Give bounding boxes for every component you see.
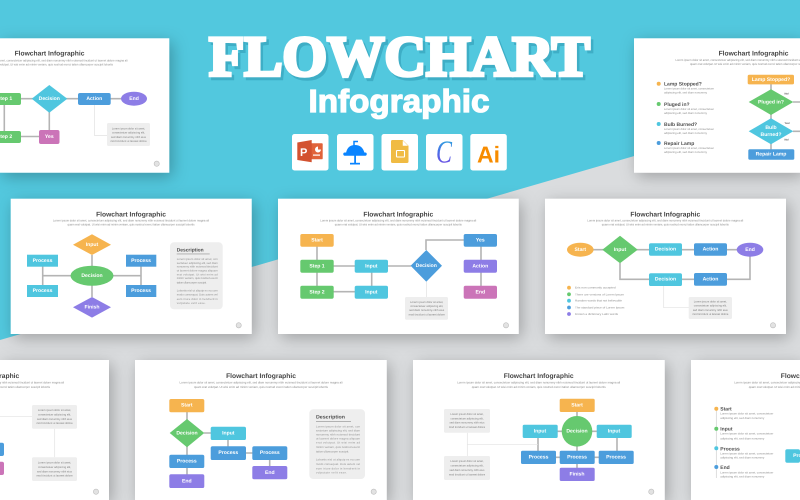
node: Process bottom left: [27, 285, 58, 297]
background: teal diagonal panel: [0, 0, 800, 340]
node: Finish: Finish: [84, 305, 100, 311]
description panel: [170, 242, 223, 309]
node: Process top left: Process: [33, 258, 53, 264]
list: Input: Lorem ipsum dolor sit amet, consectetuer: [720, 432, 773, 436]
footer icon: [154, 161, 159, 166]
node: Bulb Burned: Bulb: [765, 125, 777, 131]
connectors: [4, 99, 121, 136]
connectors: [187, 412, 270, 475]
node: Start: Start: [311, 238, 323, 244]
description panel: Description: [177, 248, 204, 254]
bullet list: Known a dictionary Latin words: [575, 312, 619, 316]
description panel: Lorem ipsum dolor sit amet, con: [316, 424, 360, 428]
callout note lower: sed diam nonummy nibh eius: [450, 469, 485, 472]
node: Decision: [70, 266, 114, 286]
footer icon: [770, 323, 776, 328]
list: Input: Input: [720, 427, 733, 433]
slide subtitle: [0, 58, 128, 66]
node: Step 1: Step 1: [309, 263, 325, 269]
icon: Adobe Illustrator: [470, 134, 507, 170]
node: Start: Start: [574, 247, 586, 253]
slide title: Flowchart Infographic: [15, 51, 85, 58]
callout note lower: [444, 456, 490, 480]
node: Input: Input: [222, 430, 235, 436]
slide subtitle: quam erat volutpat. Ut wisi enim ad minim veniam, quis nostrud exerci tation ullamcorper suscipit lobortis: [602, 223, 729, 227]
node: Decision lower: [649, 273, 682, 286]
description panel: erat volutpat. Ut wisi enim ad: [316, 441, 360, 445]
branch labels: [784, 92, 790, 141]
list: Bulb Burned: Bulb Burned?: [664, 122, 697, 128]
callout note: [689, 297, 732, 319]
slide subtitle: Lorem ipsum dolor sit amet, consectetuer adipiscing elit, sed diam nonummy nibh euismod tincidunt ut laoreet dolore magna ali: [180, 381, 343, 385]
list: Process: [714, 446, 773, 460]
node: Yes: [464, 234, 497, 247]
callout note lower: Lorem ipsum dolor sit amet,: [38, 462, 71, 464]
icon: Keynote: [337, 134, 374, 170]
node: Process right: Process: [606, 454, 626, 460]
footer icon: [371, 489, 376, 494]
node: Start: [560, 399, 595, 412]
description panel: Description: [316, 415, 345, 421]
callout note lower: mod tincidunt ut laoreet dolore: [36, 475, 73, 478]
slide subtitle: [457, 381, 621, 389]
footer icon: [236, 323, 241, 328]
callout leader: [664, 286, 689, 308]
node: Input right: [597, 425, 632, 438]
description panel: minim veniam, quis nostrud exerci: [177, 276, 218, 280]
node: Process left: [169, 455, 204, 468]
list: End: adipiscing elit, sed diam nonummy: [720, 475, 765, 479]
slide subtitle: Lorem ipsum dolor sit amet, consectetuer adipiscing elit, sed diam nonummy nibh euismod tincidunt ut laoreet dolore magna ali: [457, 381, 621, 385]
description panel: nonummy nibh euismod tincidunt: [316, 432, 360, 436]
node: Input: [602, 236, 638, 263]
node: Process top left: [27, 255, 58, 267]
slide subtitle: Lorem ipsum dolor sit amet, consectetuer adipiscing elit, sed diam nonummy nibh euismod tincidunt ut laoreet dolore magna ali: [587, 219, 744, 223]
node: Input lower: Input: [365, 289, 378, 295]
callout note upper: [444, 409, 490, 433]
slide subtitle: [53, 219, 209, 227]
callout note: sed diam nonummy nibh eius: [111, 136, 147, 139]
node: Action lower: Action: [703, 276, 718, 282]
slide subtitle: Lorem ipsum dolor sit amet, consectetuer adipiscing elit, sed diam nonummy nibh euismod tincidunt ut laoreet dolore magna ali: [53, 219, 209, 223]
slide subtitle: [734, 381, 800, 389]
slide title: Flowchart Infographic: [226, 373, 296, 380]
node: Input: Input: [86, 242, 99, 248]
node: End: End: [129, 96, 139, 102]
icon: Canva: [426, 134, 462, 170]
node: Process left: Process: [177, 458, 197, 464]
callout note upper: sed diam nonummy nibh eius: [450, 422, 485, 425]
slide card: [634, 38, 800, 173]
list: Process: adipiscing elit, sed diam nonummy: [720, 456, 765, 460]
callout note lower: consectetuer adipiscing elit,: [450, 464, 484, 468]
node: Finish: Finish: [570, 471, 584, 477]
connectors: [538, 412, 617, 468]
node: End right: [252, 466, 287, 479]
node: blue partial: [0, 443, 4, 456]
callout note upper: consectetuer adipiscing elit,: [38, 414, 71, 416]
description panel: nonummy nibh euismod tincidunt: [177, 265, 218, 269]
node: Input: [211, 427, 246, 440]
node: Bulb Burned: Burned?: [761, 132, 781, 138]
list: Lamp Stopped: Lorem ipsum dolor sit amet, consectetuer: [664, 87, 714, 91]
slide content: [0, 51, 159, 166]
list: Bulb Burned: Lorem ipsum dolor sit amet, consectetuer: [664, 127, 714, 131]
node: Process partial: [785, 449, 800, 463]
slide: branching process with description: [135, 360, 387, 500]
node: Finish: [560, 468, 595, 481]
slide content: [444, 373, 654, 494]
list: Start: [714, 407, 773, 420]
node: Input right: Input: [608, 428, 621, 434]
list: Pluged in: [657, 102, 714, 115]
slide subtitle: Lorem ipsum dolor sit amet, consectetuer adipiscing elit, sed diam nonummy nibh euismod tincidunt ut laoreet dolore magna ali: [320, 219, 477, 223]
node: Action: [78, 93, 111, 105]
node: Decision: [170, 419, 204, 447]
node: End left: [169, 474, 204, 488]
icon: Adobe Illustrator: Ai: [477, 141, 500, 167]
callout note upper: Lorem ipsum dolor sit amet,: [450, 413, 484, 416]
node: Lamp Stopped: Lamp Stopped?: [752, 77, 790, 83]
slide subtitle: [676, 58, 800, 66]
slide: top-left flowchart: [0, 38, 169, 173]
description panel: modo consequat. Duis autem vel: [316, 462, 360, 466]
slide subtitle: quam erat volutpat. Ut wisi enim ad minim veniam, quis nostrud exerci tation ullamcorper suscipit lobortis: [194, 385, 328, 389]
slide: two-row flow with list: [545, 199, 786, 334]
bullet list: Eris non commonly accepted: [575, 286, 616, 290]
list: Repair Lamp: Lorem ipsum dolor sit amet, consectetuer: [664, 146, 714, 150]
slide content: [714, 373, 800, 479]
description panel: erat volutpat. Ut wisi enim ad: [177, 272, 218, 276]
node: Decision: Decision: [416, 263, 437, 269]
callout note upper: mod tincidunt ut laoreet dolore: [449, 426, 486, 429]
slide card: [545, 199, 786, 334]
callout note lower: Lorem ipsum dolor sit amet,: [450, 460, 484, 463]
slide subtitle: [320, 219, 477, 227]
description panel: ut laoreet dolore magna aliquam: [316, 436, 361, 440]
slide content: [169, 373, 376, 494]
node: Yes: Yes: [476, 238, 485, 244]
node: Process middle: Process: [567, 454, 587, 460]
node: Action upper: Action: [703, 246, 718, 252]
slide subtitle: quam erat volutpat. Ut wisi enim ad minim veniam, quis nostrud exerci tation ullamcorper suscipit lobortis: [68, 223, 195, 227]
list: End: [714, 465, 773, 479]
list: Pluged in: Pluged in?: [664, 102, 690, 108]
node: End left: End: [182, 478, 192, 484]
node: Action upper: [694, 243, 727, 256]
node: Action lower: [694, 273, 727, 286]
slide card: [691, 360, 800, 500]
callout note lower: [32, 457, 77, 481]
description panel: vulputate velit esse.: [177, 301, 206, 305]
node: Repair Lamp: [748, 149, 794, 160]
node: Decision: [32, 85, 67, 113]
branch labels: No!: [784, 92, 789, 95]
list: Bulb Burned: [657, 122, 714, 135]
node: Decision: Decision: [39, 96, 60, 102]
bullet list: There are versions of Lorem Ipsum: [575, 292, 625, 296]
bullet list: The standard piece of Lorem Ipsum: [575, 306, 625, 310]
description panel: [309, 409, 365, 479]
node: Process top right: Process: [131, 258, 151, 264]
slide card: [0, 360, 109, 500]
slide card: [11, 199, 252, 334]
list: Lamp Stopped: adipiscing elit, sed diam nonummy: [664, 91, 708, 95]
slide content: [300, 212, 509, 328]
slide: top-right decision list: [634, 38, 800, 173]
node: Lamp Stopped: [748, 75, 794, 84]
callout leaders: [467, 433, 538, 456]
node: Process right: [252, 446, 287, 460]
callout note: Lorem ipsum dolor sit amet,: [410, 301, 444, 304]
callout note: mod tincidunt ut laoreet dolore: [110, 140, 147, 143]
slide card: [135, 360, 387, 500]
node: Pluged in: [749, 89, 793, 115]
node: Input upper: Input: [365, 263, 378, 269]
slide card: [278, 199, 519, 334]
icon: PowerPoint: [292, 134, 328, 170]
node: Process middle: Process: [218, 450, 238, 456]
node: Decision: [562, 416, 592, 447]
description panel: eum iriure dolor in hendrerit in: [177, 297, 218, 301]
callout note: [107, 123, 150, 146]
icon: Canva: C: [436, 134, 452, 170]
slide: bottom-left cropped: [0, 360, 109, 500]
callout note upper: sed diam nonummy nibh eius: [37, 418, 73, 421]
callout leader: [94, 105, 107, 136]
slide content: [657, 50, 800, 160]
node: Step 2: [300, 286, 334, 299]
footer icon: [503, 323, 509, 328]
node: Decision upper: [649, 243, 682, 256]
node: Step 2: Step 2: [309, 289, 325, 295]
node: pink partial: [0, 462, 4, 475]
node: Process middle: [560, 451, 595, 464]
node: Process bottom right: Process: [131, 288, 151, 294]
node: Process right: Process: [260, 450, 280, 456]
description panel: tation ullamcorper suscipit.: [316, 449, 349, 453]
node: Action: Action: [86, 96, 102, 102]
connectors: [317, 240, 481, 292]
node: Process top right: [126, 255, 156, 267]
branch labels: No!: [784, 138, 789, 141]
bullet list: [567, 286, 625, 316]
callout note lower: mod tincidunt ut laoreet dolore: [449, 473, 486, 476]
node: End: [121, 92, 147, 106]
footer icon: [93, 489, 99, 494]
node: Input left: Input: [534, 428, 547, 434]
slide content: [567, 212, 776, 328]
node: Process bottom left: Process: [33, 288, 53, 294]
slide content: [27, 212, 241, 328]
callout note upper: [32, 405, 77, 429]
footer icon: [649, 489, 654, 494]
list: Start: adipiscing elit, sed diam nonummy: [720, 416, 765, 420]
list: Bulb Burned: adipiscing elit, sed diam nonummy: [664, 131, 708, 135]
list: Lamp Stopped: Lamp Stopped?: [664, 82, 702, 88]
list: Repair Lamp: [657, 141, 714, 154]
slide subtitle: [587, 219, 744, 227]
list: Start: Lorem ipsum dolor sit amet, consectetuer: [720, 412, 773, 416]
node: End right: End: [265, 470, 275, 476]
slide: steps to decision: [278, 199, 519, 334]
list: End: Lorem ipsum dolor sit amet, consectetuer: [720, 470, 773, 474]
node: Finish: [73, 297, 111, 318]
bullet list: Random words that not believable: [575, 299, 622, 303]
node: Start: Start: [571, 402, 583, 408]
callout leader: [426, 282, 428, 297]
list: End: End: [720, 465, 730, 471]
node: Start: [567, 243, 594, 257]
callout note: Lorem ipsum dolor sit amet,: [694, 300, 727, 304]
list: Input: [714, 427, 773, 440]
node: Process left: [521, 451, 556, 464]
heading: FLOWCHART: FLOWCHART: [209, 26, 590, 88]
connectors: [771, 84, 800, 150]
node: End: [737, 243, 763, 257]
list: Pluged in: adipiscing elit, sed diam nonummy: [664, 111, 708, 115]
description panel: Lobortis nisl ut aliquip ex ea com: [177, 289, 218, 293]
slide title: Flowchart Infographic: [630, 212, 701, 219]
connectors: [43, 255, 141, 297]
callout leaders: [0, 416, 55, 457]
node: Action: [464, 260, 497, 273]
heading: Infographic: Infographic: [308, 83, 490, 119]
callout note: [405, 297, 448, 320]
slide content: [0, 373, 99, 494]
description panel: Lorem ipsum dolor sit amet, con: [177, 257, 218, 261]
timeline line: [715, 408, 717, 478]
callout note upper: mod tincidunt ut laoreet dolore: [36, 422, 73, 425]
list: Lamp Stopped: [657, 82, 714, 95]
node: Step 1: [300, 260, 334, 273]
node: Input upper: [355, 260, 388, 273]
node: Input: Input: [614, 247, 627, 253]
node: Step 2: [0, 131, 21, 143]
callout note lower: sed diam nonummy nibh eius: [37, 470, 73, 474]
node: Repair Lamp: Repair Lamp: [756, 152, 786, 158]
callout note: mod tincidunt ut laoreet dolore: [409, 313, 445, 316]
slide subtitle: [0, 381, 64, 389]
icon: PowerPoint: P: [300, 147, 307, 159]
list: Input: adipiscing elit, sed diam nonummy: [720, 436, 765, 440]
callout note lower: consectetuer adipiscing elit,: [38, 466, 71, 469]
node: Action: Action: [472, 263, 488, 269]
node: Pluged in: Pluged in?: [758, 99, 784, 105]
node: Process right: [599, 451, 634, 464]
list: Pluged in: Lorem ipsum dolor sit amet, consectetuer: [664, 107, 714, 111]
callout note: consectetuer adipiscing elit,: [410, 305, 443, 308]
slide card: [0, 38, 169, 173]
node: Decision upper: Decision: [655, 247, 676, 253]
callout note: mod tincidunt ut laoreet dolore: [692, 313, 729, 316]
callout note: consectetuer adipiscing elit,: [694, 305, 727, 308]
callout note: Lorem ipsum dolor sit amet,: [112, 128, 145, 130]
slide title: Flowchart Infographic: [719, 50, 789, 57]
node: Decision: Decision: [176, 430, 198, 436]
list: Repair Lamp: Repair Lamp: [664, 141, 694, 147]
node: Start: Start: [181, 402, 193, 408]
list: Start: Start: [720, 407, 732, 413]
node: Process left: Process: [529, 454, 549, 460]
node: Process middle: [211, 446, 246, 460]
list: Process: Process: [720, 446, 740, 452]
node: Bulb Burned: [749, 118, 793, 144]
description panel: eum iriure dolor in hendrerit in: [316, 466, 360, 470]
icon row: software formats: [292, 134, 507, 170]
slide title: Flowchart Infographic: [96, 212, 166, 219]
slide: decision hub with description: [11, 199, 252, 334]
callout note upper: consectetuer adipiscing elit,: [450, 417, 484, 420]
description panel: Lobortis nisl ut aliquip ex ea com: [316, 458, 361, 462]
description panel: tation ullamcorper suscipit.: [177, 280, 207, 284]
node: End: End: [475, 289, 485, 295]
node: Decision: Decision: [566, 429, 588, 435]
description panel: vulputate velit esse.: [316, 470, 347, 474]
node: Process bottom right: [126, 285, 156, 297]
node: Start: [300, 234, 334, 247]
branch labels: Yes!: [784, 122, 790, 125]
description panel: ut laoreet dolore magna aliquam: [177, 268, 218, 272]
node: Yes: [39, 130, 60, 144]
node: End: End: [745, 247, 755, 253]
callout note upper: Lorem ipsum dolor sit amet,: [38, 409, 71, 412]
slide title: Flowchart Infographic: [504, 373, 574, 380]
node: Decision lower: Decision: [655, 277, 676, 283]
callout note: sed diam nonummy nibh eius: [409, 309, 445, 312]
callout note: consectetuer adipiscing elit,: [112, 132, 145, 135]
slide title: Flowchart Infographic: [363, 212, 434, 219]
node: Input: [73, 234, 111, 255]
node: End: [464, 286, 497, 299]
heading: FLOWCHART: FLOWCHART: [212, 28, 592, 92]
description panel: sectetuer adipiscing elit, sed diam: [316, 428, 361, 432]
description panel: modo consequat. Duis autem vel: [177, 293, 218, 297]
icon: Google Slides: [382, 134, 418, 170]
list: Repair Lamp: adipiscing elit, sed diam nonummy: [664, 150, 708, 154]
slide subtitle: quam erat volutpat. Ut wisi enim ad minim veniam, quis nostrud exerci tation ullamcorper suscipit lobortis: [335, 223, 462, 227]
node: Decision: Decision: [81, 273, 103, 279]
slide: bottom-right timeline: [691, 360, 800, 500]
slide subtitle: quam erat volutpat. Ut wisi enim ad minim veniam, quis nostrud exerci tation ullamcorper suscipit lobortis: [472, 385, 606, 389]
slide: central decision circle: [413, 360, 665, 500]
list: Process: Lorem ipsum dolor sit amet, consectetuer: [720, 452, 773, 456]
node: Start: [169, 399, 204, 412]
connectors: [593, 250, 750, 279]
callout note: sed diam nonummy nibh eius: [693, 309, 728, 312]
description panel: sectetuer adipiscing elit, sed diam: [177, 261, 218, 265]
description panel: minim veniam, quis nostrud exerci: [316, 445, 360, 449]
slide subtitle: [180, 381, 343, 389]
node: Input lower: [355, 286, 388, 299]
node: Decision: [411, 250, 442, 282]
node: Step 1: [0, 93, 21, 105]
slide card: [413, 360, 665, 500]
node: Input left: [523, 425, 558, 438]
node: Yes: Yes: [45, 134, 54, 140]
